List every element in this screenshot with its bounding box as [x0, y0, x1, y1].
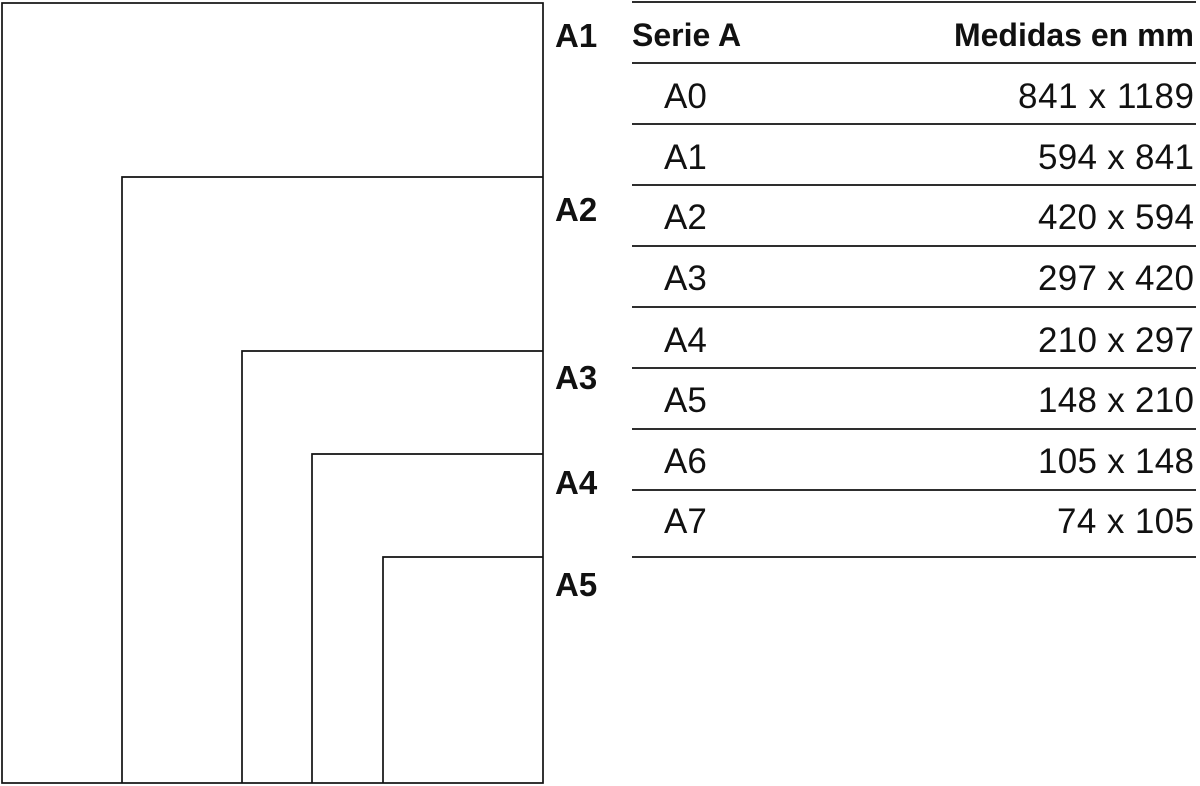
diagram labels — [555, 17, 598, 603]
label A4: A4 — [555, 464, 598, 501]
row A4: 210 x 297 — [1038, 321, 1194, 360]
row A4 — [664, 321, 1194, 360]
row A3: A3 — [664, 259, 707, 298]
label A5: A5 — [555, 566, 597, 603]
sheet A4 — [312, 454, 543, 783]
row A2: A2 — [664, 198, 707, 237]
row A2 — [664, 198, 1194, 237]
row A7: 74 x 105 — [1057, 502, 1194, 541]
sheet A1 — [2, 3, 543, 783]
row A3: 297 x 420 — [1038, 259, 1194, 298]
row A6 — [664, 442, 1194, 481]
diagram: nested A paper sizes — [2, 3, 543, 783]
row A7 — [664, 502, 1194, 541]
row A4: A4 — [664, 321, 707, 360]
table header: Serie A — [632, 17, 741, 53]
row A1: A1 — [664, 138, 707, 177]
row A2: 420 x 594 — [1038, 198, 1194, 237]
row A5: 148 x 210 — [1038, 381, 1194, 420]
label A3: A3 — [555, 359, 597, 396]
row A3 — [664, 259, 1194, 298]
row A6: 105 x 148 — [1038, 442, 1194, 481]
row A5 — [664, 381, 1194, 420]
row A7: A7 — [664, 502, 707, 541]
table: A series measurements — [632, 2, 1196, 557]
sheet A5 — [383, 557, 543, 783]
row A0: A0 — [664, 77, 707, 116]
row A5: A5 — [664, 381, 707, 420]
row A1 — [664, 138, 1194, 177]
row A6: A6 — [664, 442, 707, 481]
row A0: 841 x 1189 — [1018, 77, 1194, 116]
sheet A3 — [242, 351, 543, 783]
table rules — [632, 2, 1196, 557]
row A1: 594 x 841 — [1038, 138, 1194, 177]
table header — [632, 17, 1194, 53]
table header: Medidas en mm — [954, 17, 1194, 53]
label A2: A2 — [555, 191, 597, 228]
sheet A2 — [122, 177, 543, 783]
row A0 — [664, 77, 1194, 116]
label A1: A1 — [555, 17, 597, 54]
